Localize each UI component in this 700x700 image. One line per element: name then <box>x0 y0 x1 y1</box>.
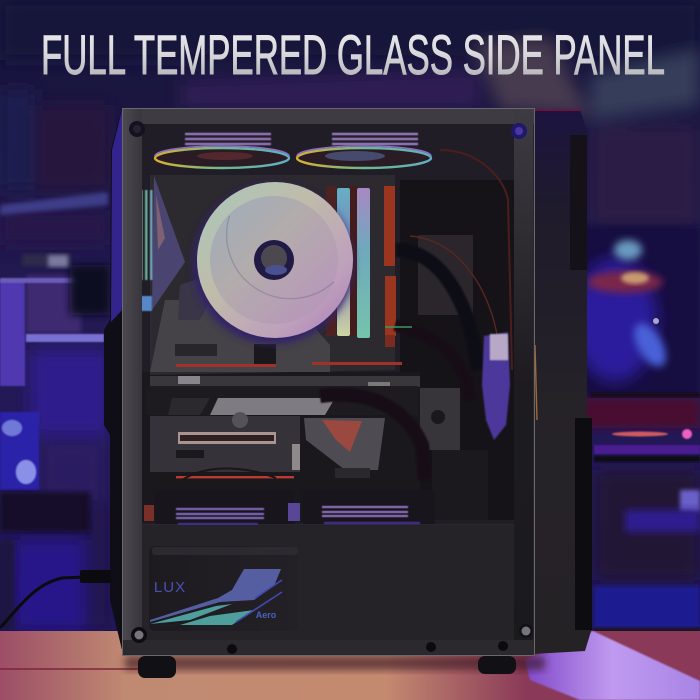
blurred shelf left <box>0 192 108 215</box>
wooden desk <box>0 631 700 700</box>
rear purple fan <box>482 332 510 440</box>
blurred framed picture left <box>0 412 39 490</box>
motherboard <box>150 175 402 375</box>
vertical RGB strip left <box>140 190 152 311</box>
case: left edge <box>104 108 122 650</box>
PSU unit <box>149 546 298 631</box>
CPU cooler fan <box>193 182 353 344</box>
screws <box>129 121 533 654</box>
power cable <box>0 570 111 628</box>
bottom fans <box>144 490 435 524</box>
chipset heatsink <box>304 388 460 478</box>
PC case <box>0 108 592 678</box>
blurred poster left <box>0 281 25 386</box>
PSU shroud <box>142 525 518 642</box>
glass frame tint <box>122 108 535 656</box>
PSU label: LUX: LUX <box>154 579 186 596</box>
case: right front panel <box>533 109 592 654</box>
top fans <box>155 134 431 169</box>
case: glass panel <box>122 108 535 656</box>
graphics card cables <box>320 395 425 480</box>
RAM sticks <box>326 186 396 347</box>
PSU graphic <box>150 569 282 625</box>
lower motherboard <box>150 412 300 480</box>
interior dark chamber <box>140 124 522 524</box>
power cables <box>385 150 512 400</box>
I/O row <box>150 376 420 388</box>
case feet <box>138 656 516 678</box>
PSU brand: Aero <box>256 610 277 620</box>
blurred monitor right <box>572 226 700 396</box>
graphics card <box>146 386 418 415</box>
